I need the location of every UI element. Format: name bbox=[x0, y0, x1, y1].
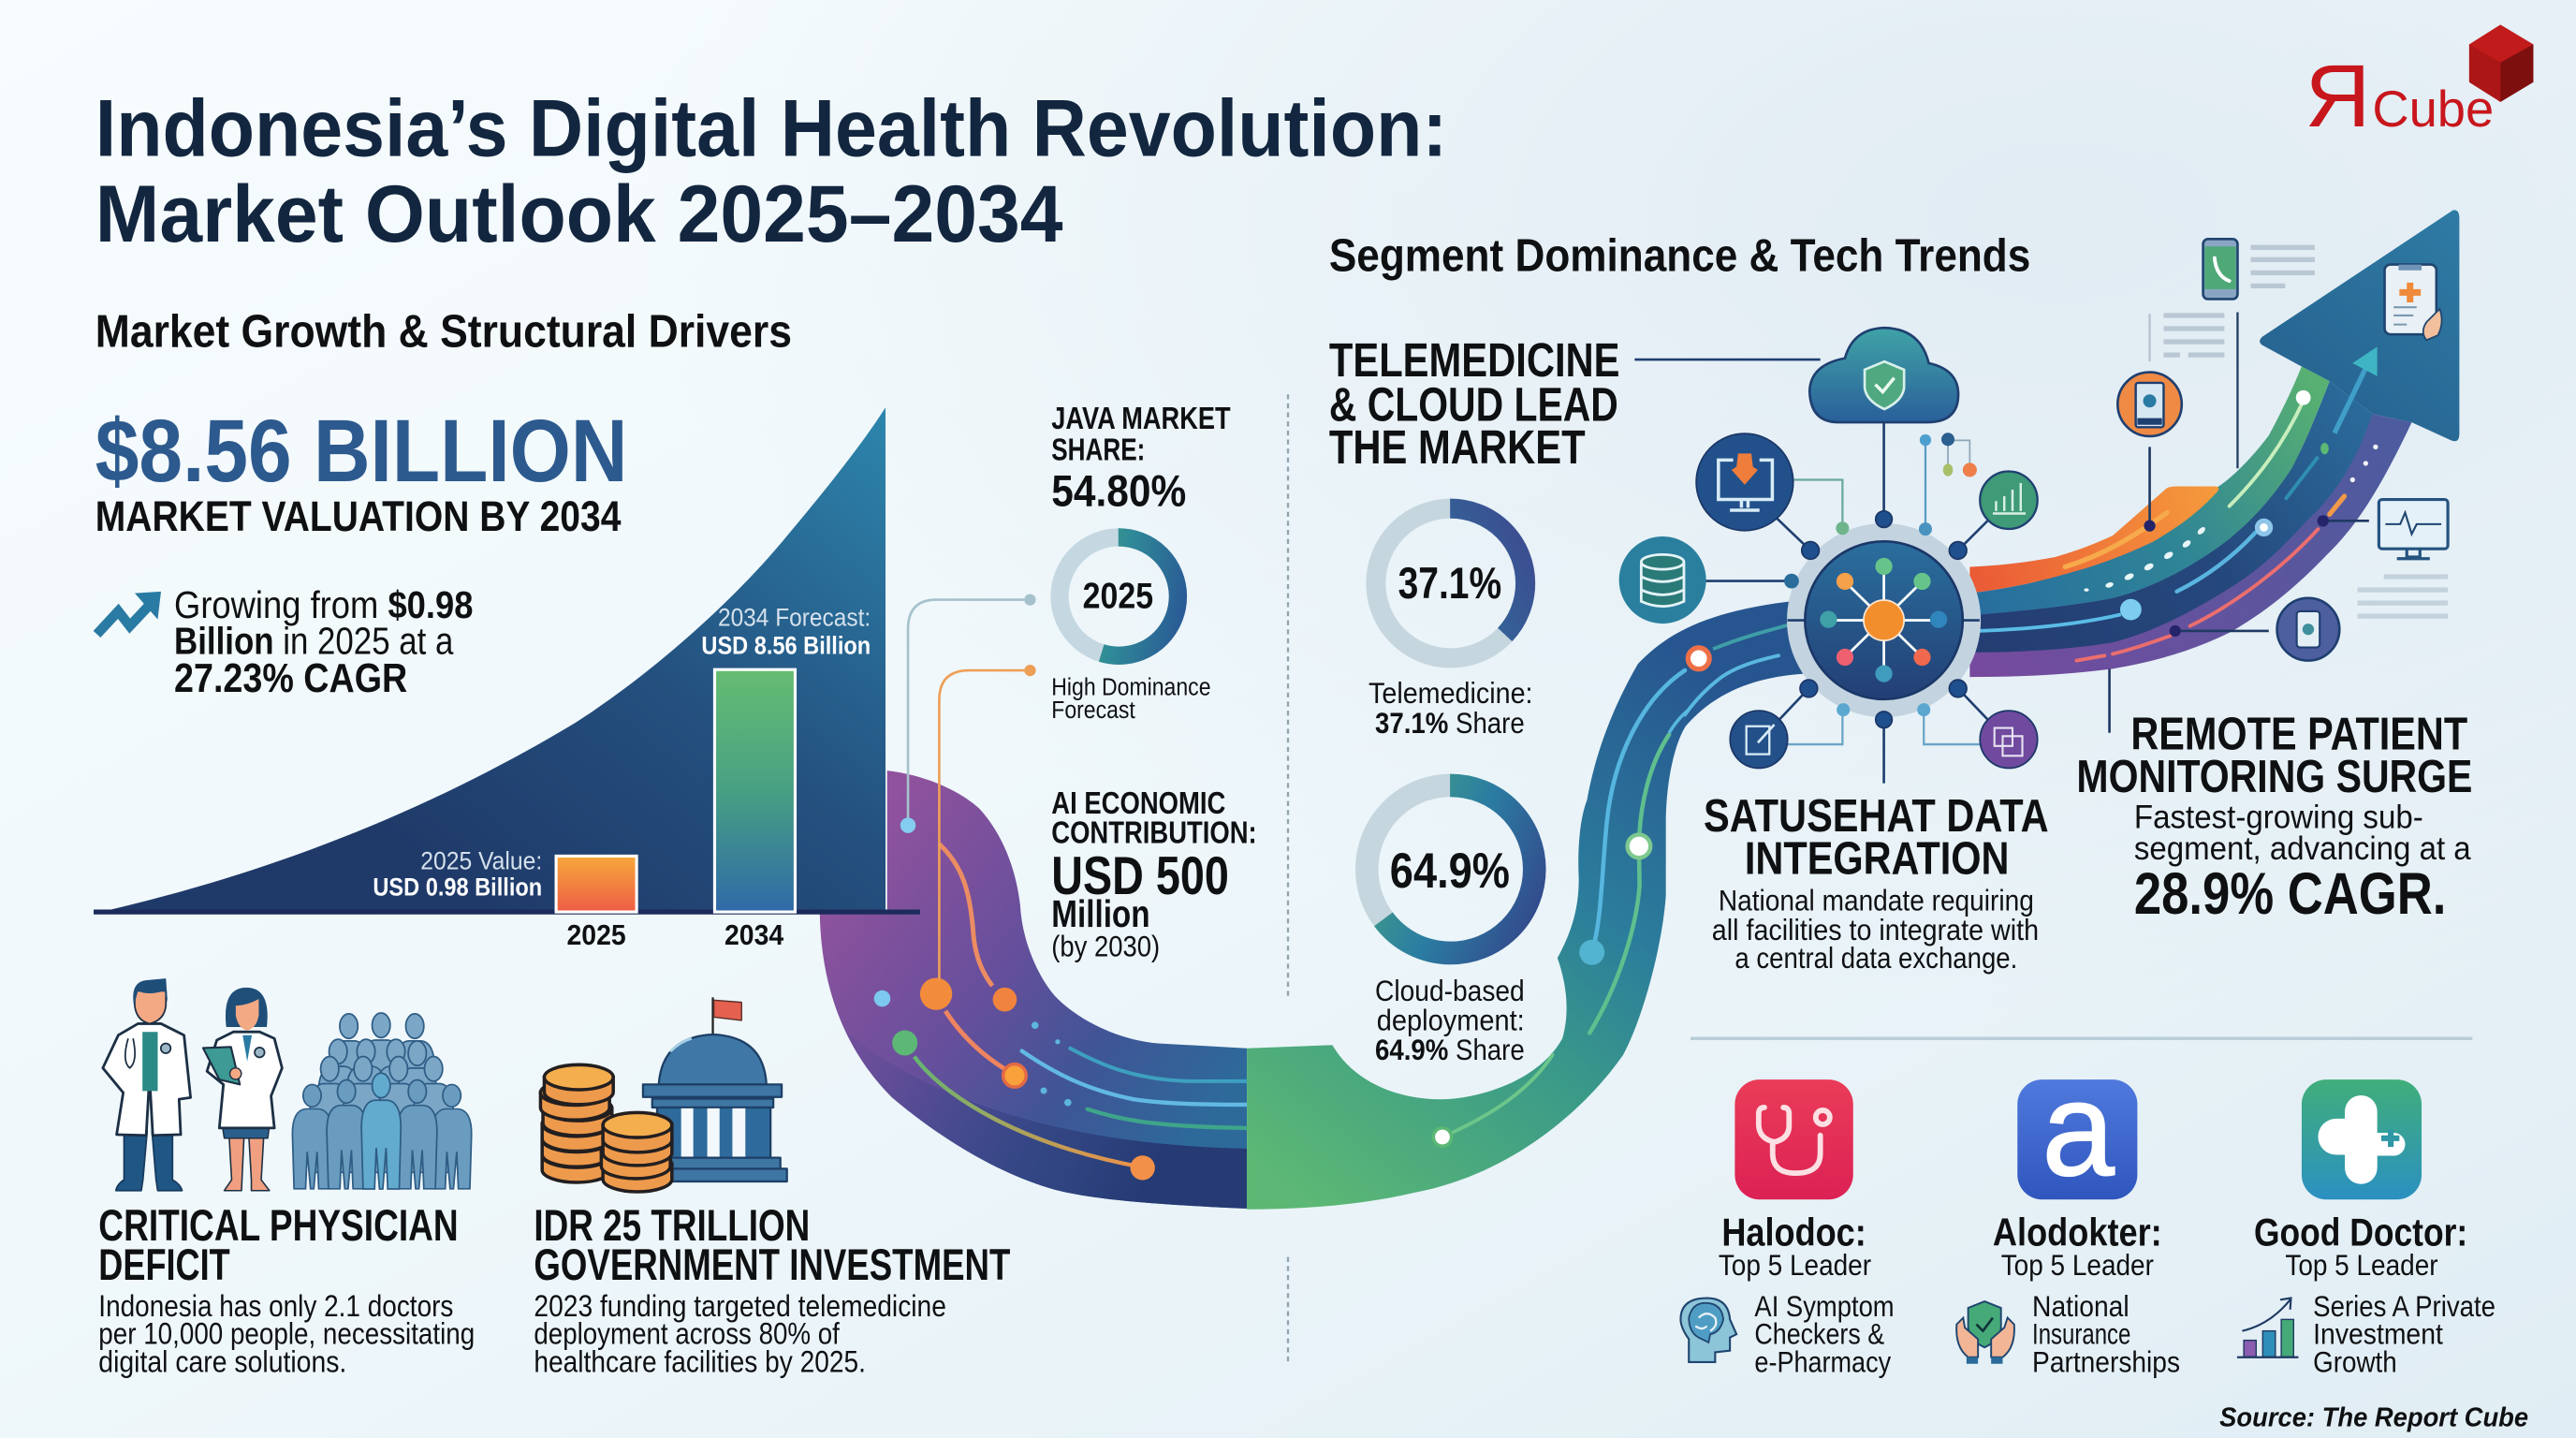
icon: orange phone circle bbox=[2117, 373, 2182, 532]
bar: 2025 bbox=[556, 856, 637, 912]
text: satusehat data integration: INTEGRATION bbox=[1745, 834, 2009, 885]
hub core bbox=[1787, 523, 1981, 717]
text: government investment: IDR 25 TRILLION bbox=[534, 1201, 810, 1251]
text: remote patient monitoring: segment, advancing at a bbox=[2134, 830, 2471, 867]
icon: smartphone with lines bbox=[2203, 239, 2315, 468]
text: telemedicine and cloud: & CLOUD LEAD bbox=[1329, 377, 1618, 431]
logo: RCube bbox=[2305, 24, 2533, 146]
stat: AI economic contribution: Million bbox=[1051, 892, 1150, 935]
icon: halodoc app bbox=[1734, 1079, 1853, 1199]
panel: halodoc: AI Symptom bbox=[1754, 1289, 1895, 1323]
stat: AI economic contribution: USD 500 bbox=[1051, 846, 1229, 906]
panel: halodoc bbox=[1680, 1079, 1895, 1379]
text: satusehat data integration: SATUSEHAT DATA bbox=[1704, 791, 2049, 842]
icon: notepad circle bbox=[1730, 711, 1788, 769]
text: government investment: 2023 funding targeted telemedicine bbox=[534, 1289, 946, 1323]
building bbox=[643, 997, 787, 1181]
icon: doctors bbox=[103, 978, 282, 1191]
text: growth summary: Billion in 2025 at a bbox=[174, 620, 454, 663]
female doctor bbox=[203, 988, 282, 1191]
panel: good doctor: Good Doctor: bbox=[2254, 1210, 2467, 1254]
horizontal divider bbox=[1690, 1037, 2472, 1039]
text: growth summary bbox=[174, 583, 473, 701]
stat: java market share: Forecast bbox=[1051, 696, 1135, 724]
label: 2025 value bbox=[373, 845, 542, 902]
text: cloud share: 64.9% Share bbox=[1375, 1033, 1525, 1066]
text: cloud share bbox=[1375, 974, 1525, 1066]
text: critical physician deficit bbox=[98, 1201, 475, 1379]
icon: monitor with pulse bbox=[2318, 500, 2448, 616]
text: cloud share: deployment: bbox=[1377, 1003, 1525, 1036]
text: satusehat data integration: all facilities to integrate with bbox=[1712, 913, 2039, 946]
network nodes bbox=[1784, 433, 1977, 728]
label: 2025 value: 2025 Value: bbox=[420, 845, 542, 874]
text: telemedicine share bbox=[1368, 676, 1533, 740]
icon: bar chart circle bbox=[1980, 472, 2038, 529]
text: remote patient monitoring: Fastest-growing sub- bbox=[2134, 800, 2423, 836]
title bbox=[95, 84, 1447, 259]
text: telemedicine share: 37.1% Share bbox=[1375, 706, 1525, 740]
stat: java market share: 54.80% bbox=[1051, 467, 1186, 517]
logo: RCube: Я bbox=[2305, 47, 2371, 146]
panel: alodokter: National bbox=[2032, 1289, 2130, 1323]
stat: AI economic contribution bbox=[1051, 786, 1257, 962]
panel: halodoc: Halodoc: bbox=[1721, 1210, 1866, 1254]
coin stacks bbox=[540, 1064, 672, 1192]
stat: market valuation bbox=[95, 402, 627, 540]
label: 2025 value: USD 0.98 Billion bbox=[373, 873, 542, 902]
text: remote patient monitoring: MONITORING SURGE bbox=[2076, 752, 2472, 802]
stat: market valuation: $8.56 BILLION bbox=[95, 402, 627, 501]
icon: documents circle bbox=[1980, 711, 2038, 769]
donut: java 54.8%: 2025 bbox=[1083, 576, 1153, 616]
donut: telemedicine 37.1% bbox=[1376, 508, 1526, 658]
label: 2034 forecast: 2034 Forecast: bbox=[718, 603, 871, 632]
panel: halodoc: e-Pharmacy bbox=[1754, 1345, 1891, 1379]
icon: monitor circle bbox=[1696, 433, 1793, 531]
donut: telemedicine 37.1%: 37.1% bbox=[1398, 559, 1501, 609]
text: government investment: GOVERNMENT INVESTMENT bbox=[534, 1240, 1010, 1290]
icon: patient monitor phone circle bbox=[2170, 598, 2339, 661]
donut: cloud 64.9%: 64.9% bbox=[1390, 844, 1510, 899]
axis labels: 2025 bbox=[567, 918, 626, 951]
icon: alodokter app: a bbox=[2042, 1055, 2115, 1204]
panel: halodoc: Checkers & bbox=[1754, 1317, 1884, 1351]
panel: good doctor: Series A Private bbox=[2313, 1289, 2496, 1323]
label: 2034 forecast bbox=[701, 603, 871, 660]
stat: AI economic contribution: CONTRIBUTION: bbox=[1051, 815, 1257, 850]
icon: document lines bbox=[2150, 314, 2224, 361]
male doctor bbox=[103, 978, 191, 1191]
stat: AI economic contribution: (by 2030) bbox=[1051, 929, 1160, 962]
icon: shield in hands bbox=[1956, 1301, 2014, 1364]
teal to green band bbox=[1969, 366, 2330, 615]
panel: good doctor: Growth bbox=[2313, 1345, 2397, 1379]
text: critical physician deficit: DEFICIT bbox=[98, 1240, 230, 1290]
panel: halodoc: Top 5 Leader bbox=[1719, 1248, 1871, 1282]
icon: document on arrowhead bbox=[2385, 265, 2442, 340]
stat: java market share bbox=[1051, 402, 1231, 724]
icon: alodokter app bbox=[2017, 1055, 2137, 1204]
icon: AI brain head bbox=[1680, 1299, 1736, 1362]
text: telemedicine and cloud: THE MARKET bbox=[1329, 420, 1586, 474]
icon: trend arrow bbox=[97, 592, 161, 634]
navy band bbox=[1969, 381, 2372, 653]
stat: java market share: JAVA MARKET bbox=[1051, 402, 1231, 436]
axis labels: 2034 bbox=[724, 918, 783, 951]
icon: good doctor app bbox=[2302, 1079, 2422, 1199]
donut: cloud 64.9% bbox=[1367, 785, 1534, 953]
text: growth summary: Growing from $0.98 bbox=[174, 583, 473, 626]
axis labels bbox=[567, 918, 783, 951]
icon: patient crowd bbox=[292, 1013, 472, 1189]
donut: java 54.8% bbox=[1060, 537, 1178, 655]
heading: segment dominance: Segment Dominance & Tech Trends bbox=[1329, 231, 2030, 282]
text: government investment: deployment across 80% of bbox=[534, 1317, 841, 1351]
text: remote patient monitoring bbox=[2076, 668, 2472, 927]
stat: java market share: High Dominance bbox=[1051, 672, 1211, 700]
orange band bbox=[1969, 487, 2218, 594]
text: satusehat data integration: a central data exchange. bbox=[1734, 941, 2017, 975]
panel: good doctor: Investment bbox=[2313, 1317, 2443, 1351]
logo: RCube: Cube bbox=[2372, 81, 2494, 138]
panel: alodokter: Insurance bbox=[2032, 1317, 2130, 1351]
stat: market valuation: MARKET VALUATION BY 2034 bbox=[95, 492, 622, 540]
icon: growth bars bbox=[2237, 1299, 2298, 1357]
icon: database circle bbox=[1619, 536, 1706, 624]
source note: Source: The Report Cube bbox=[2219, 1402, 2528, 1432]
text: telemedicine and cloud bbox=[1329, 333, 1620, 474]
panel: alodokter: Top 5 Leader bbox=[2001, 1248, 2154, 1282]
panel: good doctor: Top 5 Leader bbox=[2285, 1248, 2438, 1282]
connector lines to java and AI stats bbox=[900, 594, 1036, 979]
label: 2034 forecast: USD 8.56 Billion bbox=[701, 631, 871, 660]
title: Market Outlook 2025–2034 bbox=[95, 169, 1063, 259]
text: critical physician deficit: digital care solutions. bbox=[98, 1345, 346, 1379]
text: government investment bbox=[534, 1201, 1010, 1379]
center dashed divider bbox=[1287, 394, 1289, 1364]
text: critical physician deficit: per 10,000 people, necessitating bbox=[98, 1317, 475, 1351]
hub: satusehat data network bbox=[1619, 328, 2038, 784]
arrowhead bbox=[2260, 210, 2459, 441]
chart: market growth area and bars bbox=[94, 407, 920, 951]
panel: alodokter: Alodokter: bbox=[1993, 1210, 2162, 1254]
title: Indonesia’s Digital Health Revolution: bbox=[95, 84, 1447, 174]
text: remote patient monitoring: REMOTE PATIENT bbox=[2130, 709, 2467, 759]
text: critical physician deficit: CRITICAL PHYSICIAN bbox=[98, 1201, 459, 1251]
text: critical physician deficit: Indonesia has only 2.1 doctors bbox=[98, 1289, 453, 1323]
connector lines bbox=[1634, 360, 1988, 784]
text: growth summary: 27.23% CAGR bbox=[174, 655, 407, 701]
text: government investment: healthcare facilities by 2025. bbox=[534, 1345, 866, 1379]
stat: AI economic contribution: AI ECONOMIC bbox=[1051, 786, 1225, 821]
purple band bbox=[1969, 414, 2411, 677]
ribbon: green to blue rising curve bbox=[1247, 601, 1804, 1210]
text: telemedicine and cloud: TELEMEDICINE bbox=[1329, 333, 1620, 387]
arrow: multi-band rising arrow bbox=[1969, 210, 2459, 677]
icon: cloud with shield bbox=[1809, 328, 1958, 422]
panel: good doctor bbox=[2237, 1079, 2496, 1379]
text: satusehat data integration bbox=[1704, 791, 2049, 975]
text: telemedicine share: Telemedicine: bbox=[1368, 676, 1533, 710]
heading: market growth: Market Growth & Structural Drivers bbox=[95, 306, 792, 357]
ribbon: left purple to navy curve bbox=[820, 770, 1247, 1209]
text: satusehat data integration: National mandate requiring bbox=[1719, 883, 2034, 917]
panel: alodokter bbox=[1956, 1055, 2180, 1379]
panel: alodokter: Partnerships bbox=[2032, 1345, 2180, 1379]
text: cloud share: Cloud-based bbox=[1375, 974, 1525, 1007]
stat: java market share: SHARE: bbox=[1051, 433, 1145, 467]
text: remote patient monitoring: 28.9% CAGR. bbox=[2134, 861, 2446, 927]
icon: coins and government building bbox=[540, 997, 787, 1192]
bar: 2034 bbox=[714, 669, 795, 912]
band details bbox=[2065, 513, 2167, 567]
